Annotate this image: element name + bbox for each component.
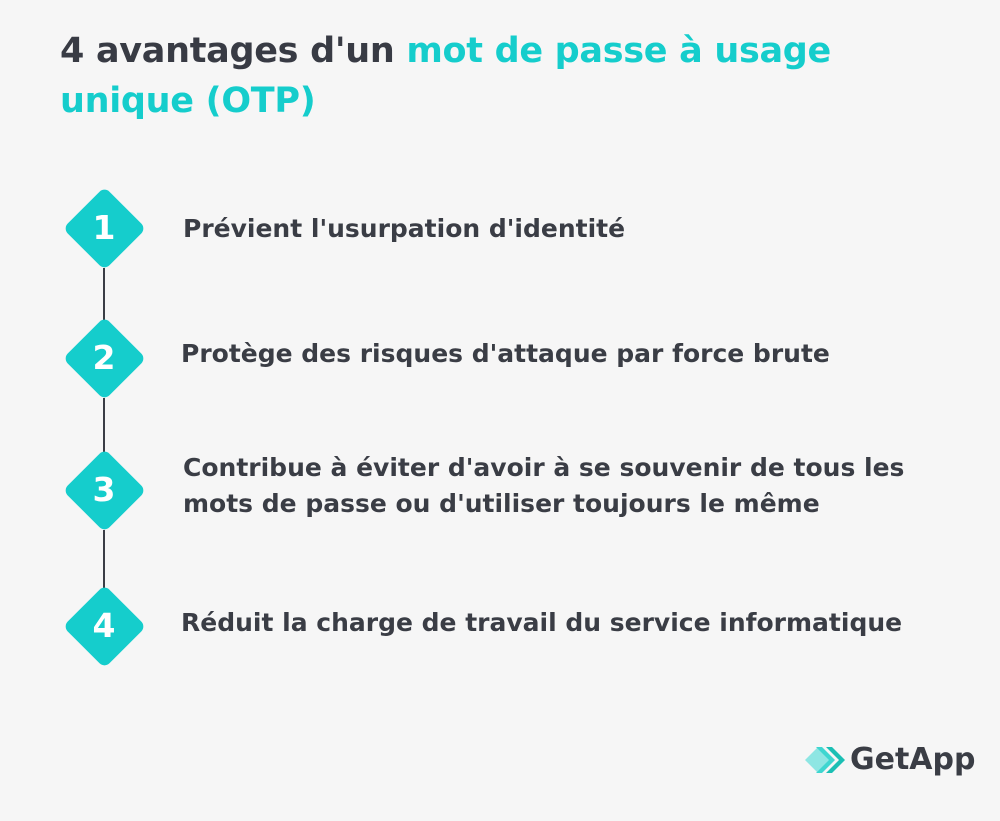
diamond 3: 3 xyxy=(93,470,115,509)
item 3 text: mots de passe ou d'utiliser toujours le même xyxy=(183,489,820,518)
diamond 2: 2 xyxy=(93,338,115,377)
title xyxy=(60,31,831,121)
diamond 4: 4 xyxy=(93,606,115,645)
diamond 1: 1 xyxy=(93,208,115,247)
title: unique (OTP) xyxy=(60,81,315,121)
diamond 3 xyxy=(66,452,144,530)
item 3 text xyxy=(183,453,904,518)
diamond 2 xyxy=(66,320,144,398)
diamond 1 xyxy=(66,190,144,268)
diamond 4 xyxy=(66,588,144,666)
connector line 3-4 xyxy=(103,530,105,588)
connector line 2-3 xyxy=(103,398,105,452)
item 1 text: Prévient l'usurpation d'identité xyxy=(183,214,625,243)
item 2 text: Protège des risques d'attaque par force brute xyxy=(181,339,830,368)
title: 4 avantages d'un mot de passe à usage xyxy=(60,31,831,71)
item 3 text: Contribue à éviter d'avoir à se souvenir de tous les xyxy=(183,453,904,482)
connector line 1-2 xyxy=(103,268,105,320)
logo: GetApp: GetApp xyxy=(850,742,975,777)
item 4 text: Réduit la charge de travail du service informatique xyxy=(181,608,902,637)
